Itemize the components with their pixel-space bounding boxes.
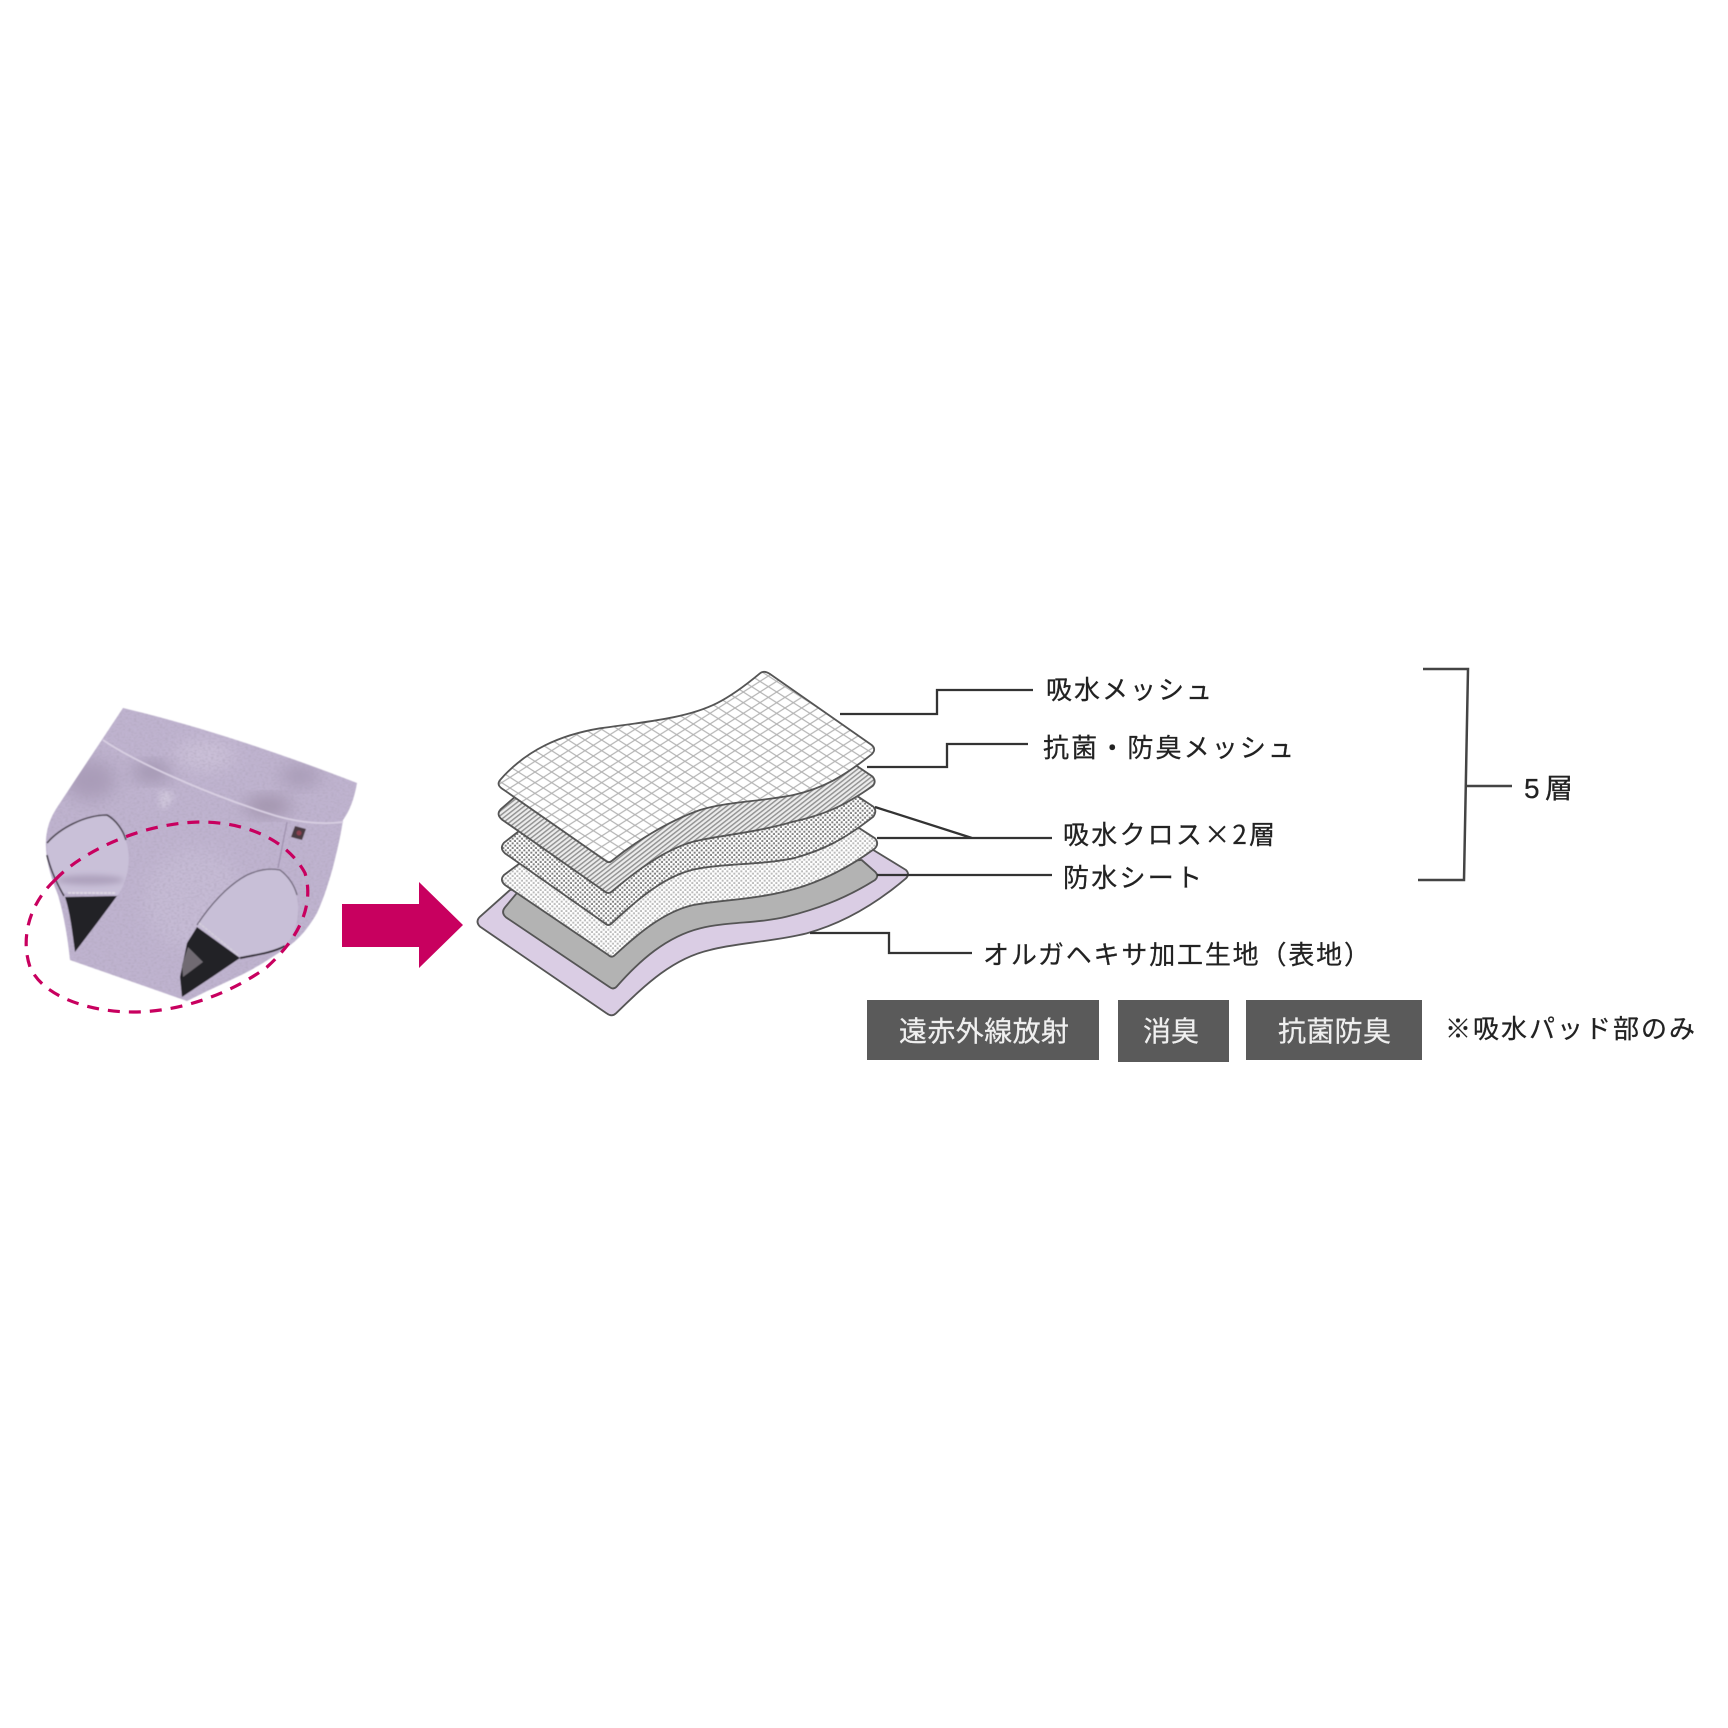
left leg opening (47, 815, 129, 895)
badge: far infrared (867, 1000, 1099, 1060)
label: absorbent cloth: 吸水クロス×2層 (1063, 815, 1275, 852)
infographic canvas (24, 668, 1694, 1062)
label: absorbent mesh: 吸水メッシュ (1046, 675, 1212, 705)
leader: outer fabric (810, 933, 972, 953)
leader: absorbent mesh (840, 690, 1033, 714)
leader: antibacterial mesh (867, 744, 1028, 767)
product photo: lavender shorts with dashed highlight (26, 700, 365, 1012)
care tag (291, 826, 306, 840)
layer: waterproof sheet (503, 860, 877, 989)
left absorbent pad (65, 896, 117, 952)
leader: absorbent cloth (875, 807, 1052, 838)
label: outer fabric: オルガヘキサ加工生地（表地） (983, 940, 1370, 970)
badge: antibacterial: 抗菌防臭 (1278, 1016, 1391, 1047)
shorts body (40, 700, 365, 1005)
right leg opening (197, 869, 298, 958)
badge: deodorizing (1118, 1000, 1229, 1062)
layer: absorbent cloth 1 (502, 735, 875, 925)
badge: antibacterial (1246, 1000, 1422, 1060)
front panel side seam (278, 822, 287, 868)
badge: deodorizing: 消臭 (1143, 1016, 1199, 1047)
layer: antibacterial deodorizing mesh (499, 703, 875, 893)
fabric knit texture (50, 711, 344, 996)
label: five layers: 5層 (1524, 773, 1573, 804)
layer: organic hexa outer fabric (477, 850, 908, 1015)
badge: far infrared: 遠赤外線放射 (899, 1016, 1069, 1047)
right absorbent pad (180, 927, 240, 997)
bracket: five layers (1418, 669, 1512, 880)
footnote: ※吸水パッド部のみ (1445, 1014, 1695, 1044)
label: antibacterial mesh: 抗菌・防臭メッシュ (1043, 733, 1294, 763)
leader lines (810, 690, 1052, 953)
layer: absorbent mesh (499, 672, 874, 862)
layered material diagram (477, 672, 908, 1015)
waistband seam (103, 740, 343, 823)
layer: absorbent cloth 2 (502, 767, 877, 957)
leader: waterproof sheet (877, 874, 1052, 876)
dashed ellipse highlight (26, 822, 308, 1012)
arrow (342, 882, 463, 968)
label: waterproof sheet: 防水シート (1063, 863, 1202, 893)
